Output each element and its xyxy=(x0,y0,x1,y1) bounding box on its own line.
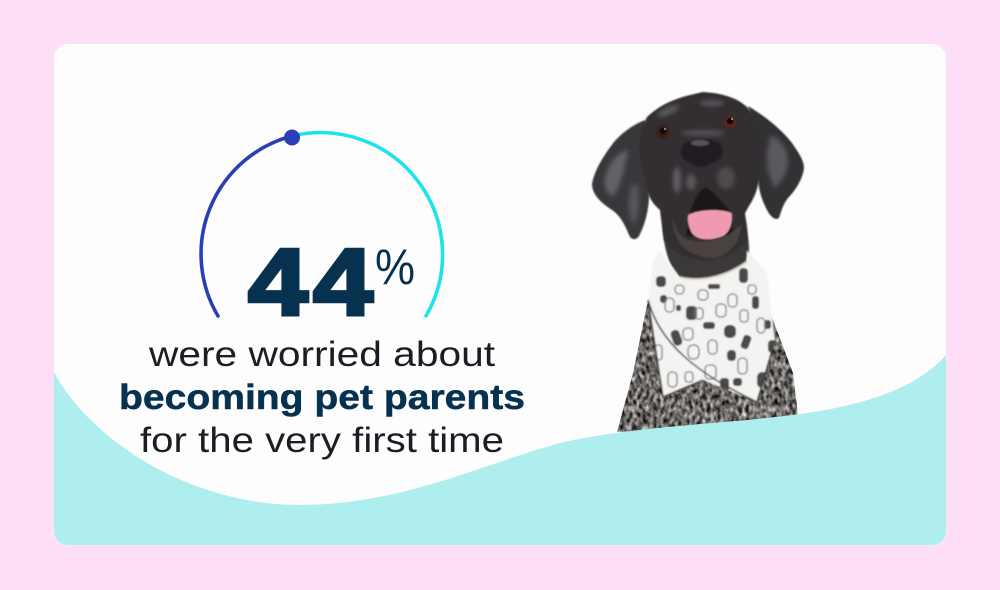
statistic xyxy=(248,230,415,336)
caption xyxy=(119,335,525,460)
mouth xyxy=(686,187,733,236)
head xyxy=(639,92,762,260)
bandana xyxy=(648,250,776,402)
bandana bottle pattern xyxy=(655,268,776,392)
number: 4 xyxy=(248,230,308,336)
dog neck xyxy=(663,225,749,283)
caption line 2: becoming pet parents xyxy=(119,378,525,417)
percent sign: % xyxy=(375,239,415,295)
arc marker xyxy=(284,130,300,146)
infographic xyxy=(54,44,946,545)
number: 4 xyxy=(313,230,373,336)
photo: dog with bandana xyxy=(592,92,804,432)
lower jaw xyxy=(673,218,742,258)
panel: card xyxy=(54,44,946,545)
right ear xyxy=(748,106,804,219)
number xyxy=(248,230,373,336)
arc progress xyxy=(201,136,292,316)
nose xyxy=(681,139,723,167)
caption line 3: for the very first time xyxy=(140,421,504,460)
dog body xyxy=(617,280,800,432)
left ear xyxy=(592,120,649,239)
caption line 1: were worried about xyxy=(148,335,495,374)
arc remainder xyxy=(292,133,443,316)
face highlights xyxy=(655,100,735,193)
wave xyxy=(54,355,946,545)
progress arc xyxy=(201,130,443,316)
eyes xyxy=(656,116,736,138)
tongue xyxy=(688,210,732,240)
